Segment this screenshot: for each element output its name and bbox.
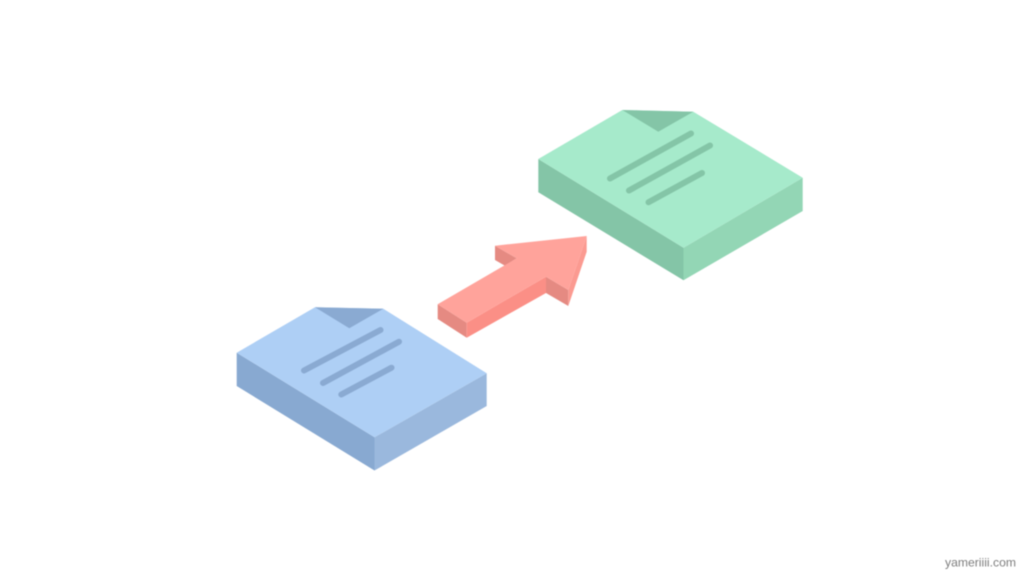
icon: green result document [538, 110, 803, 280]
watermark text: yameriiii.com [945, 556, 1016, 570]
arrow: pink arrow pointing from blue to green document [438, 236, 587, 338]
icon: blue source document [237, 307, 487, 470]
